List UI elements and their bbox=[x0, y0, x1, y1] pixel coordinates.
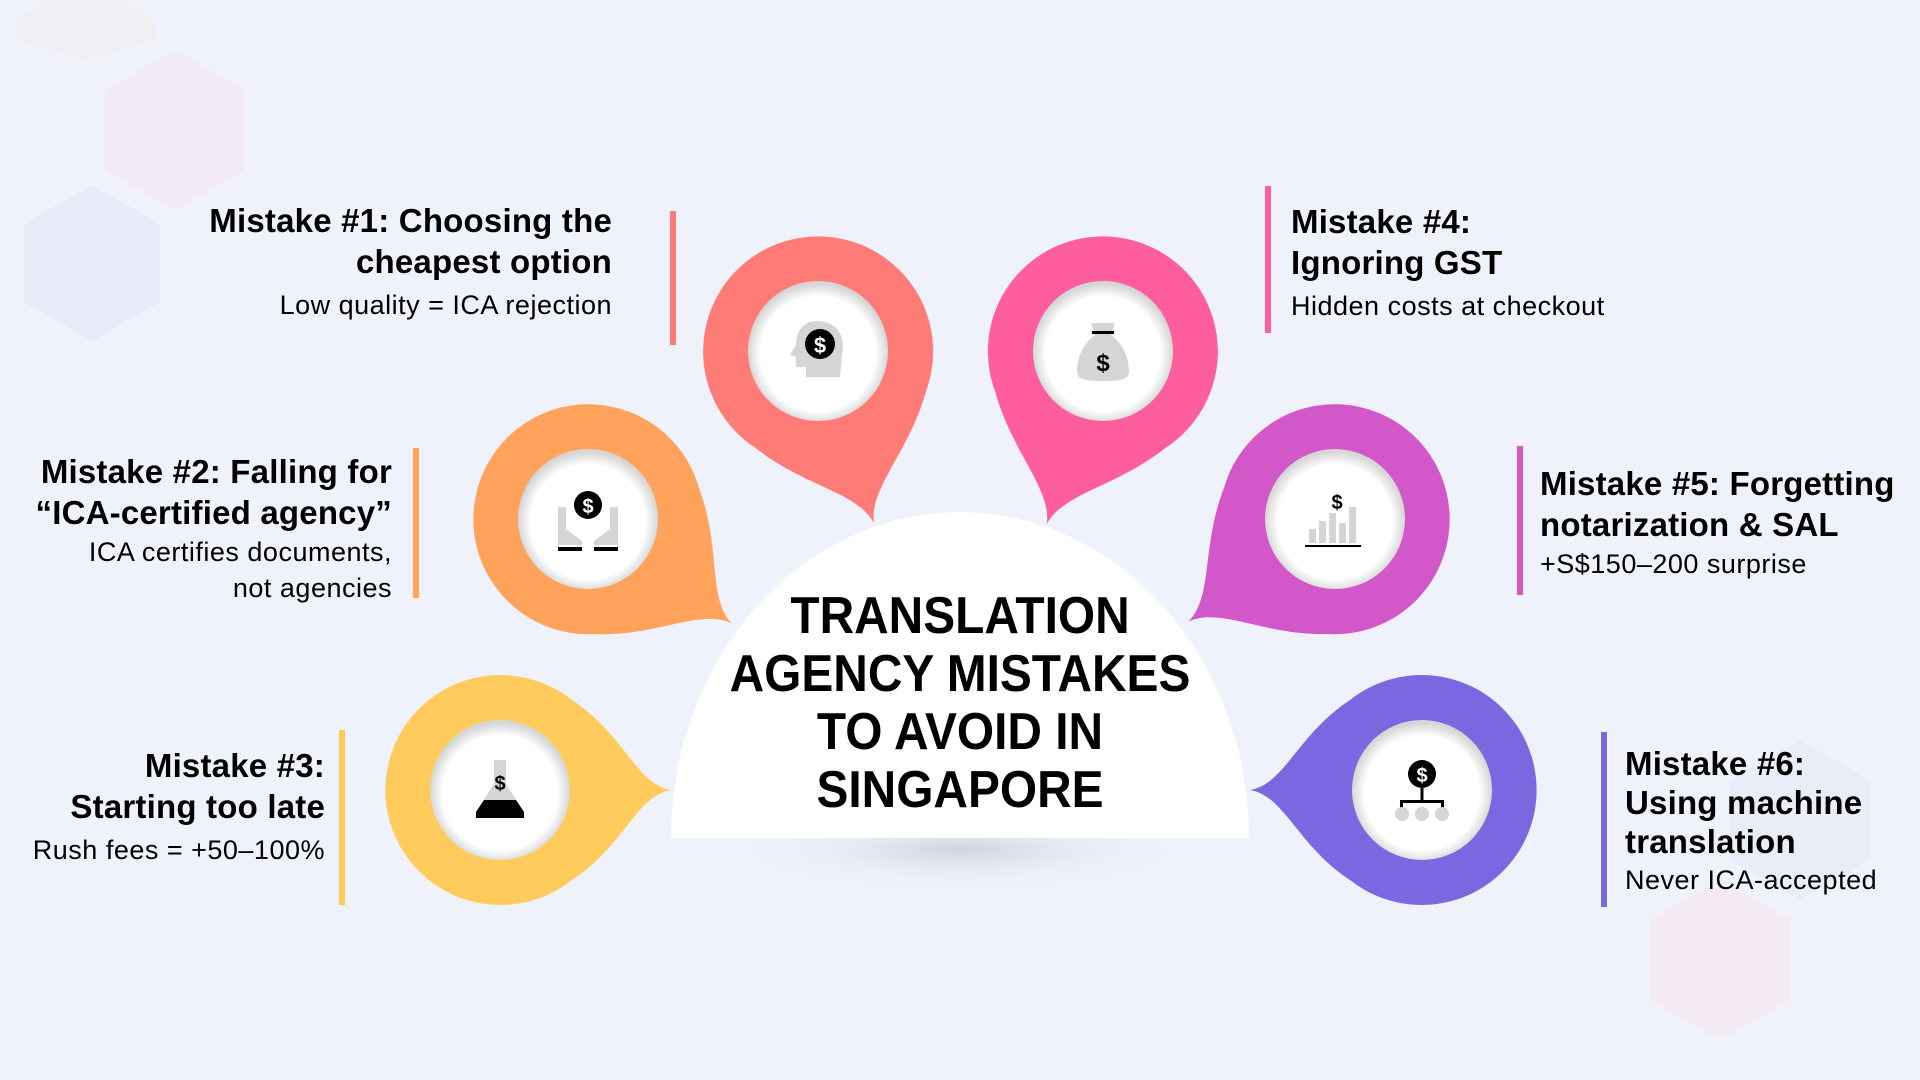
title bbox=[730, 587, 1190, 819]
text: mistake 6 bbox=[1625, 745, 1877, 895]
pin 4 bbox=[937, 206, 1248, 560]
title: AGENCY MISTAKES bbox=[730, 645, 1190, 703]
text: mistake 1 bbox=[209, 202, 612, 320]
pin 5 bbox=[1122, 359, 1495, 716]
text: mistake 2 bbox=[36, 453, 392, 603]
icon: hands with coin bbox=[558, 491, 618, 551]
icon: flask bbox=[476, 760, 524, 818]
bar 4 bbox=[1265, 186, 1271, 333]
title: TO AVOID IN bbox=[817, 703, 1103, 761]
pin 3 bbox=[385, 675, 671, 905]
text: mistake 3: Rush fees = +50–100% bbox=[33, 835, 325, 865]
text: mistake 2: Mistake #2: Falling for bbox=[41, 453, 392, 490]
bar 3 bbox=[339, 730, 345, 905]
icon: hierarchy with dollar bbox=[1395, 760, 1449, 821]
text: mistake 6: Mistake #6: bbox=[1625, 745, 1805, 782]
title: SINGAPORE bbox=[816, 761, 1104, 819]
icon: head with dollar: $ bbox=[814, 333, 826, 358]
pin 6 bbox=[1250, 675, 1537, 905]
text: mistake 5: +S$150–200 surprise bbox=[1540, 549, 1807, 579]
title: TRANSLATION bbox=[790, 587, 1130, 645]
icon: hierarchy with dollar: $ bbox=[1416, 765, 1428, 787]
icon: flask: $ bbox=[494, 773, 506, 795]
bar 1 bbox=[670, 211, 676, 345]
text: mistake 6: translation bbox=[1625, 823, 1796, 860]
pin 1 bbox=[673, 206, 983, 559]
text: mistake 6: Never ICA-accepted bbox=[1625, 865, 1877, 895]
text: mistake 1: Mistake #1: Choosing the bbox=[209, 202, 612, 239]
icon: bar chart bbox=[1305, 492, 1361, 547]
bar 2 bbox=[413, 448, 419, 598]
text: mistake 5 bbox=[1540, 465, 1895, 579]
text: mistake 2: ICA certifies documents, bbox=[89, 537, 392, 567]
text: mistake 2: “ICA-certified agency” bbox=[36, 494, 392, 531]
dome panel with title bbox=[671, 512, 1249, 838]
text: mistake 4: Hidden costs at checkout bbox=[1291, 291, 1605, 321]
icon: money bag: $ bbox=[1096, 350, 1110, 377]
text: mistake 3: Mistake #3: bbox=[145, 747, 325, 784]
text: mistake 5: notarization & SAL bbox=[1540, 506, 1839, 543]
text: mistake 4: Mistake #4: bbox=[1291, 203, 1471, 240]
icon: head with dollar bbox=[790, 321, 843, 377]
icon: bar chart: $ bbox=[1331, 492, 1343, 514]
bar 5 bbox=[1517, 446, 1523, 595]
text: mistake 6: Using machine bbox=[1625, 784, 1862, 821]
text: mistake 2: not agencies bbox=[233, 573, 392, 603]
pin 2 bbox=[428, 359, 800, 717]
text: mistake 1: Low quality = ICA rejection bbox=[280, 290, 612, 320]
icon: hands with coin: $ bbox=[582, 496, 594, 518]
text: mistake 1: cheapest option bbox=[356, 243, 612, 280]
bar 6 bbox=[1601, 732, 1607, 907]
text: mistake 3 bbox=[33, 747, 325, 865]
text: mistake 3: Starting too late bbox=[70, 788, 325, 825]
text: mistake 4: Ignoring GST bbox=[1291, 244, 1502, 281]
icon: money bag bbox=[1077, 323, 1129, 381]
text: mistake 5: Mistake #5: Forgetting bbox=[1540, 465, 1895, 502]
text: mistake 4 bbox=[1291, 203, 1605, 321]
